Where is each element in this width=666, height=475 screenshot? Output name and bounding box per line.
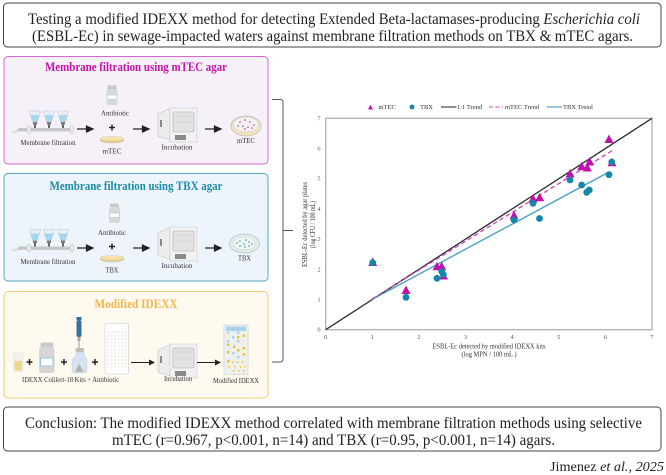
label: incubation: Incubation: [162, 262, 193, 270]
icon: plus: [61, 359, 67, 365]
trend line: mTEC: [372, 151, 612, 299]
label: TBX result: TBX: [238, 254, 252, 262]
data series: mTEC: [368, 134, 616, 294]
conclusion: [4, 407, 661, 451]
x axis ticks: 1: [371, 334, 374, 341]
panel: modified IDEXX: [4, 292, 268, 398]
icon: plus: [109, 124, 115, 130]
icon: antibiotic bottle: [109, 204, 120, 223]
icon: membrane filtration manifold: [12, 111, 74, 134]
panel heading: TBX: Membrane filtration using TBX agar: [50, 178, 223, 193]
conclusion: mTEC (r=0.967, p<0.001, n=14) and TBX (r=0.95, p<0.001, n=14) agars.: [112, 432, 555, 449]
label: antibiotic: Antibiotic: [101, 110, 129, 118]
x axis ticks: [324, 334, 654, 341]
arrow: [197, 360, 221, 366]
trend line: TBX: [372, 172, 609, 300]
label: mTEC result: mTEC: [237, 137, 255, 145]
arrow: [77, 245, 93, 251]
x axis ticks: 7: [650, 334, 654, 341]
arrow: [77, 126, 93, 132]
x axis title: (log MPN / 100 mL ): [462, 350, 517, 358]
x axis ticks: 6: [604, 334, 607, 341]
label: incubation: Incubation: [164, 375, 192, 383]
icon: water sample bag: [14, 353, 23, 372]
arrow: [131, 360, 155, 366]
x axis ticks: 3: [464, 334, 467, 341]
icon: membrane filtration manifold: [12, 230, 74, 252]
label: modified IDEXX: Modified IDEXX: [213, 377, 260, 385]
trend line: 1:1: [326, 118, 652, 330]
title: (ESBL-Ec) in sewage-impacted waters against membrane filtration methods on TBX & mTEC agars.: [32, 28, 633, 45]
chart legend: TBX Trend: [563, 104, 594, 111]
conclusion: Conclusion: The modified IDEXX method correlated with membrane filtration methods using selective: [25, 415, 642, 432]
data series: TBX: [369, 159, 615, 301]
x axis ticks: 0: [324, 334, 327, 341]
y axis title: (log CFU / 100 mL): [309, 201, 317, 248]
arrow: [133, 245, 149, 251]
x axis ticks: 2: [417, 334, 421, 341]
y axis ticks: 0: [317, 327, 321, 334]
title: [4, 3, 661, 47]
y axis title: [301, 182, 317, 267]
icon: plus: [26, 359, 32, 365]
icon: mTEC result dish: [231, 116, 261, 136]
chart legend: 1:1 Trend: [457, 104, 483, 111]
chart legend: mTEC Trend: [505, 104, 540, 111]
arrow: [133, 126, 149, 132]
icon: empty quanti-tray: [105, 324, 128, 374]
icon: Colilert reagent bottle: [39, 342, 54, 373]
y axis title: ESBL-Ec detected by agar plates: [301, 182, 309, 267]
icon: antibiotic bottle: [106, 86, 118, 105]
y axis ticks: 5: [317, 176, 321, 183]
panel: membrane filtration using TBX agar: [4, 174, 268, 281]
plot frame: [326, 118, 652, 330]
label: membrane filtration: Membrane filtration: [20, 139, 76, 147]
scatter chart: [301, 104, 654, 358]
y axis ticks: 2: [317, 266, 321, 273]
x axis title: [432, 342, 546, 358]
icon: plus: [109, 244, 115, 250]
icon: modified IDEXX result tray: [224, 325, 248, 374]
label: IDEXX kits: IDEXX Colilert-18 Kits + Antibiotic: [22, 376, 119, 384]
panel: membrane filtration using mTEC agar: [4, 56, 268, 164]
icon: incubator: [158, 108, 197, 142]
title: Testing a modified IDEXX method for detecting Extended Beta-lactamases-producing Escherichia coli: [28, 11, 640, 28]
panel heading: modified IDEXX: Modified IDEXX: [94, 296, 178, 311]
x axis ticks: 4: [510, 334, 514, 341]
label: antibiotic: Antibiotic: [98, 229, 126, 237]
x axis ticks: 5: [557, 334, 560, 341]
y axis ticks: 1: [317, 296, 321, 304]
icon: incubator: [158, 344, 197, 378]
arrow: [205, 126, 221, 132]
chart legend: TBX: [420, 104, 433, 111]
label: TBX: TBX: [106, 266, 119, 274]
y axis ticks: 3: [317, 236, 321, 243]
icon: pipette: [76, 317, 82, 351]
citation: Jimenez et al., 2025: [550, 460, 664, 475]
y axis ticks: 6: [317, 146, 321, 152]
bracket connecting panels to chart: [272, 100, 293, 362]
label: membrane filtration: Membrane filtration: [20, 258, 76, 266]
label: incubation: Incubation: [162, 144, 193, 152]
chart legend: mTEC: [378, 104, 396, 111]
y axis ticks: 7: [317, 115, 321, 122]
chart legend: [368, 104, 594, 111]
panel heading: mTEC: Membrane filtration using mTEC agar: [45, 59, 227, 74]
icon: incubator: [158, 227, 197, 261]
icon: TBX result dish: [230, 234, 260, 253]
icon: mTEC agar plate: [100, 136, 124, 143]
icon: TBX agar plate: [100, 256, 124, 262]
x axis title: ESBL-Ec detected by modified IDEXX kits: [432, 342, 546, 350]
icon: plus: [92, 359, 98, 365]
label: mTEC: mTEC: [102, 148, 122, 156]
icon: sample vessel: [72, 348, 87, 373]
y axis ticks: [317, 115, 321, 334]
arrow: [205, 245, 221, 251]
y axis ticks: 4: [317, 206, 321, 213]
